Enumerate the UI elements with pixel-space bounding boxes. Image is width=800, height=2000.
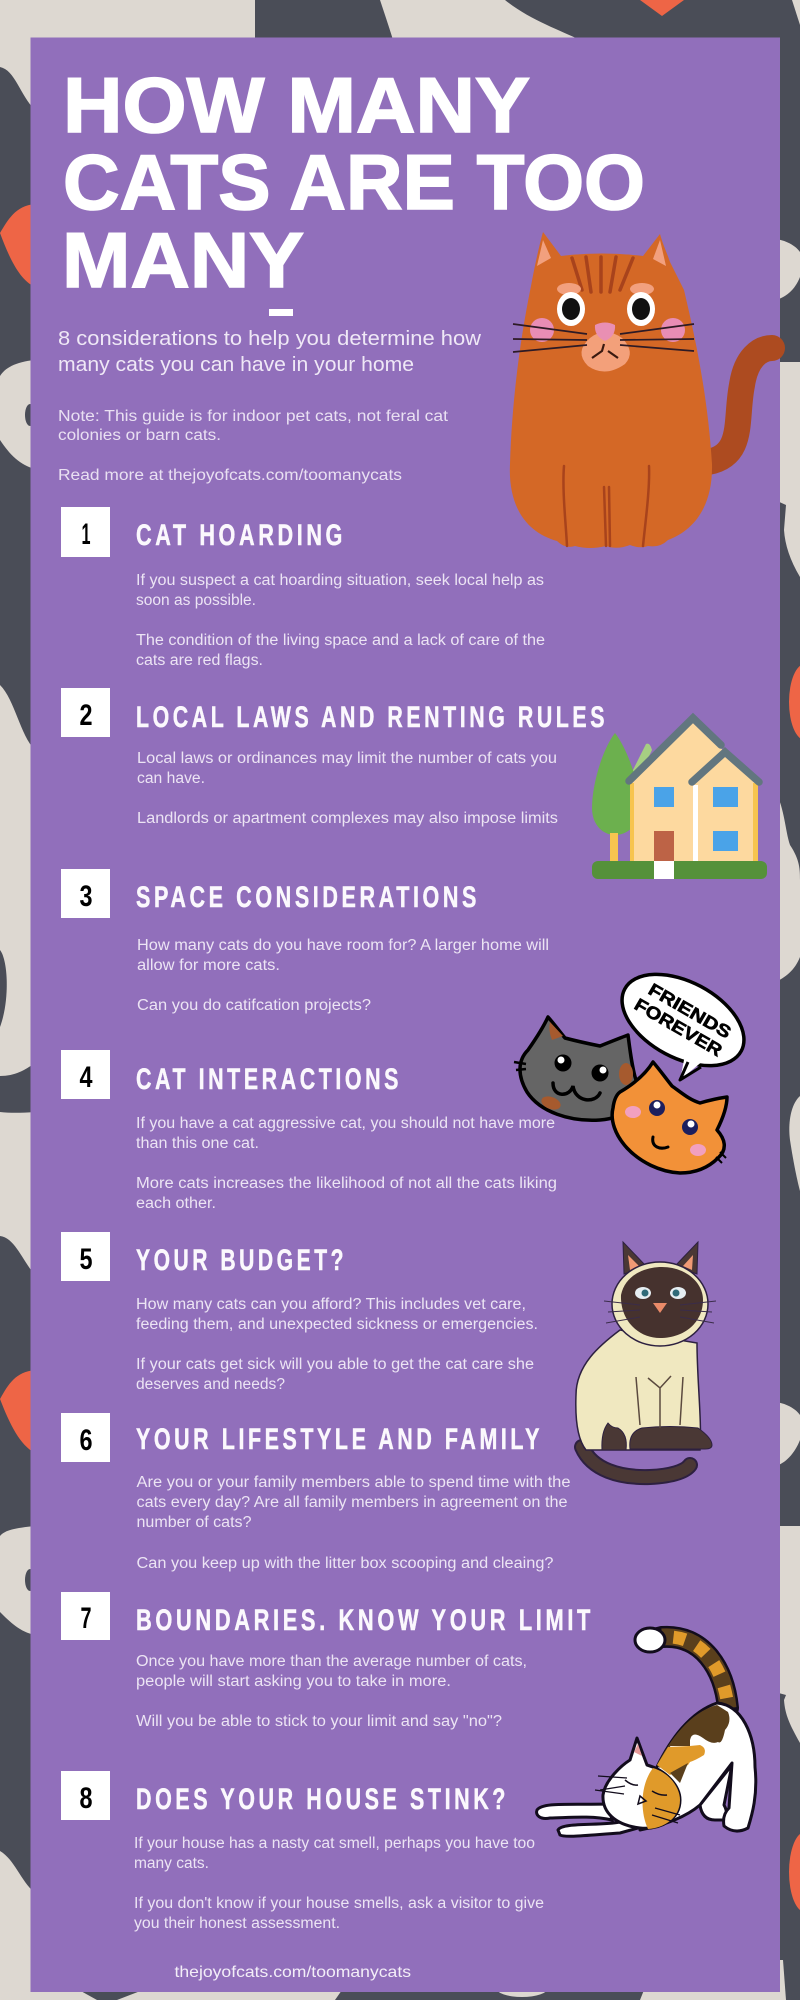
body text 4: If you have a cat aggressive cat, you should not have more <box>136 1115 555 1132</box>
body text 3: Can you do catifcation projects? <box>137 997 371 1014</box>
title <box>62 61 645 304</box>
number box 2 <box>61 688 110 737</box>
body text 7: Will you be able to stick to your limit and say "no"? <box>136 1713 502 1730</box>
heading 1: CAT HOARDING <box>136 519 346 552</box>
heading 6: YOUR LIFESTYLE AND FAMILY <box>136 1423 543 1456</box>
heading 4: CAT INTERACTIONS <box>136 1063 402 1096</box>
heading 2: LOCAL LAWS AND RENTING RULES <box>136 701 608 734</box>
body text 6: cats every day? Are all family members in agreement on the <box>136 1494 568 1511</box>
section 3: space considerations <box>61 869 549 1014</box>
heading 8: DOES YOUR HOUSE STINK? <box>136 1783 509 1816</box>
body text 1: The condition of the living space and a lack of care of the <box>136 632 545 649</box>
body text 1: cats are red flags. <box>136 652 263 669</box>
body text 5: If your cats get sick will you able to get the cat care she <box>136 1356 534 1373</box>
section 7: boundaries <box>61 1592 594 1730</box>
illustration: house <box>592 718 767 879</box>
note text: Read more at thejoyofcats.com/toomanycats <box>58 467 402 484</box>
body text 3: allow for more cats. <box>137 957 280 974</box>
body text 4: More cats increases the likelihood of not all the cats liking <box>136 1175 557 1192</box>
body text 1: If you suspect a cat hoarding situation, seek local help as <box>136 572 544 589</box>
body text 3: How many cats do you have room for? A larger home will <box>137 937 549 954</box>
section 8: house stink <box>61 1771 544 1932</box>
illustration: friends forever cats <box>514 955 759 1173</box>
orange cat <box>612 1062 727 1173</box>
heading 5: YOUR BUDGET? <box>136 1244 347 1277</box>
number box 1: 1 <box>82 518 90 551</box>
number box 7: 7 <box>80 1602 92 1635</box>
number box 5 <box>61 1232 110 1281</box>
body text 1 <box>136 572 545 669</box>
body text 6: Can you keep up with the litter box scooping and cleaing? <box>136 1555 554 1572</box>
illustration: stretching calico cat <box>537 1628 756 1836</box>
body text 1: soon as possible. <box>136 592 256 609</box>
body text 7: Once you have more than the average number of cats, <box>136 1653 527 1670</box>
subtitle: 8 considerations to help you determine how <box>58 327 481 350</box>
speech bubble <box>607 955 759 1085</box>
note text: Note: This guide is for indoor pet cats, not feral cat <box>58 408 449 425</box>
section 1: cat hoarding <box>61 507 545 669</box>
title: HOW MANY <box>63 61 530 149</box>
title underline dash <box>269 309 293 316</box>
grey cat <box>514 1017 637 1120</box>
body text 8: you their honest assessment. <box>134 1915 340 1932</box>
title: CATS ARE TOO <box>63 138 645 226</box>
number box 6 <box>61 1413 110 1462</box>
body text 8: many cats. <box>134 1855 209 1872</box>
note text: colonies or barn cats. <box>58 427 221 444</box>
illustration: siamese cat <box>576 1242 716 1477</box>
speech bubble: FRIENDS <box>645 979 735 1042</box>
body text 4: each other. <box>136 1195 216 1212</box>
speech bubble: FOREVER <box>631 994 726 1061</box>
number box 5: 5 <box>80 1243 92 1276</box>
number box 7 <box>61 1592 110 1640</box>
note text <box>58 408 449 484</box>
section 5: your budget <box>61 1232 538 1393</box>
body text 2 <box>137 750 558 827</box>
section 6: lifestyle and family <box>61 1413 570 1572</box>
body text 8: If you don't know if your house smells, ask a visitor to give <box>134 1895 544 1912</box>
body text 5: How many cats can you afford? This includes vet care, <box>136 1296 526 1313</box>
body text 5: deserves and needs? <box>136 1376 285 1393</box>
body text 8 <box>134 1835 544 1932</box>
body text 4 <box>136 1115 557 1212</box>
body text 2: Local laws or ordinances may limit the number of cats you <box>137 750 557 767</box>
footer url: thejoyofcats.com/toomanycats <box>174 1964 411 1981</box>
body text 2: Landlords or apartment complexes may also impose limits <box>137 810 558 827</box>
number box 3: 3 <box>80 880 92 913</box>
number box 4 <box>61 1050 110 1099</box>
subtitle <box>58 327 481 376</box>
illustration: orange cat <box>510 232 772 548</box>
section 2: local laws <box>61 688 608 827</box>
heading 7: BOUNDARIES. KNOW YOUR LIMIT <box>136 1604 594 1637</box>
body text 6: Are you or your family members able to spend time with the <box>136 1474 570 1491</box>
body text 4: than this one cat. <box>136 1135 259 1152</box>
body text 7 <box>136 1653 527 1730</box>
body text 5 <box>136 1296 538 1393</box>
body text 6 <box>136 1474 570 1572</box>
number box 4: 4 <box>80 1061 93 1094</box>
heading 3: SPACE CONSIDERATIONS <box>136 881 480 914</box>
section 4: cat interactions <box>61 1050 557 1212</box>
body text 2: can have. <box>137 770 205 787</box>
number box 8: 8 <box>80 1782 92 1815</box>
number box 1 <box>61 507 110 557</box>
body text 8: If your house has a nasty cat smell, perhaps you have too <box>134 1835 535 1852</box>
subtitle: many cats you can have in your home <box>58 353 414 376</box>
body text 5: feeding them, and unexpected sickness or emergencies. <box>136 1316 538 1333</box>
title: MANY <box>62 216 304 304</box>
number box 6: 6 <box>80 1424 92 1457</box>
number box 8 <box>61 1771 110 1820</box>
body text 6: number of cats? <box>136 1514 252 1531</box>
number box 2: 2 <box>80 699 92 732</box>
body text 7: people will start asking you to take in more. <box>136 1673 451 1690</box>
number box 3 <box>61 869 110 918</box>
body text 3 <box>137 937 549 1014</box>
